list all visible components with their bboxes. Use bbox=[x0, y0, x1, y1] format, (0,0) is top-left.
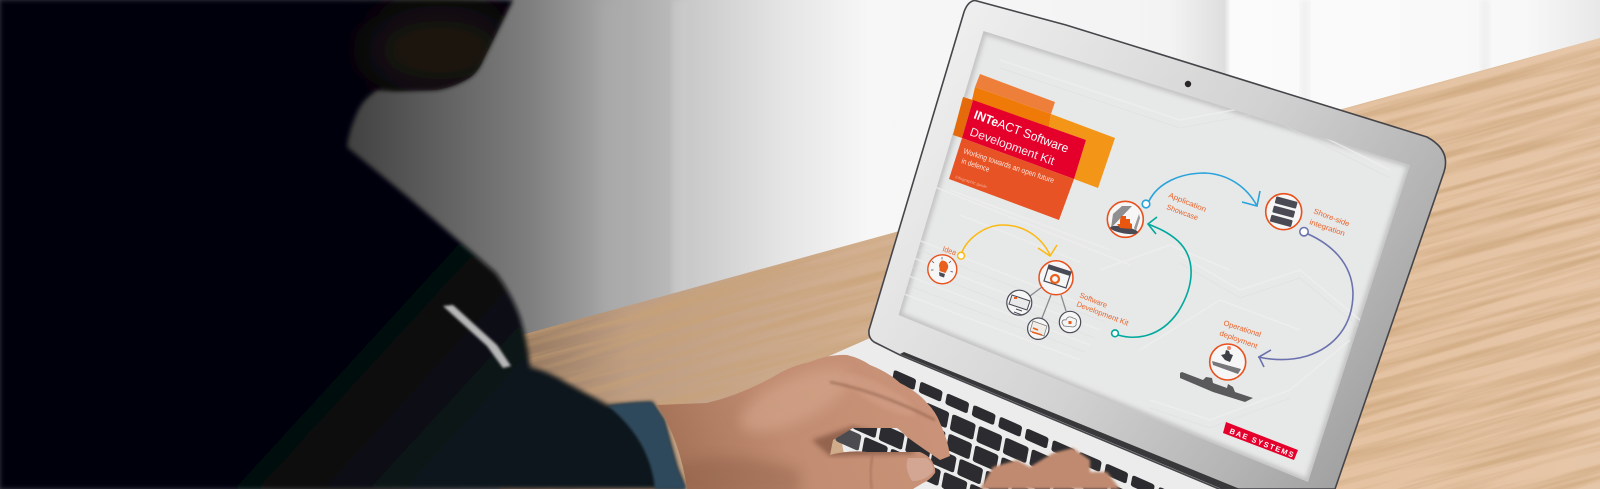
light orange panel bbox=[975, 74, 1055, 114]
connector lines bbox=[1030, 287, 1066, 318]
laptop bbox=[827, 0, 1446, 489]
slide title block bbox=[949, 74, 1115, 220]
hinge strip bbox=[900, 352, 1240, 489]
right hand fingers bbox=[980, 448, 1120, 489]
small caption: Infographic guide bbox=[955, 174, 988, 189]
screen circuit background pattern bbox=[904, 110, 1367, 344]
arrow: teal bbox=[1112, 217, 1191, 337]
gap between arm and body bbox=[443, 305, 511, 368]
left thumb nail bbox=[907, 458, 933, 481]
icon: form window bbox=[1028, 318, 1049, 339]
webcam bbox=[1185, 81, 1191, 87]
icon: cloud bbox=[1059, 311, 1081, 333]
arrow: purple bbox=[1258, 228, 1353, 367]
label: Operational deployment bbox=[1218, 318, 1263, 351]
arrow: blue bbox=[1142, 173, 1260, 208]
dark orange panel bbox=[953, 97, 973, 138]
red title panel bbox=[962, 100, 1086, 179]
person head shading bbox=[365, 5, 515, 95]
icon: monitor bbox=[1007, 290, 1032, 315]
label: Shore-side integration bbox=[1308, 206, 1351, 238]
icon: servers bbox=[1266, 194, 1302, 230]
keyboard keys bbox=[833, 350, 1191, 489]
title text: Development Kit bbox=[968, 125, 1057, 168]
icon: light bulb bbox=[928, 255, 957, 284]
typing hands bbox=[650, 350, 1120, 489]
orange-red subtitle panel bbox=[949, 138, 1074, 220]
label: Idea: Idea bbox=[941, 244, 958, 257]
BAE Systems logo: BAE SYSTEMS bbox=[1228, 426, 1295, 459]
flow: application showcase to shore-side integration bbox=[1142, 173, 1351, 238]
mid orange panel bbox=[972, 87, 1051, 127]
person: head and shoulder silhouette bbox=[0, 0, 686, 489]
icon: software development kit bbox=[1039, 261, 1073, 295]
flow: software development kit to application showcase bbox=[1107, 191, 1208, 337]
ship silhouette bbox=[1180, 372, 1253, 402]
shirt sleeve cuff bbox=[608, 402, 686, 489]
label: Operational deployment: Operational bbox=[1222, 318, 1263, 339]
label: Operational deployment: deployment bbox=[1218, 328, 1260, 351]
laptop lid bbox=[869, 0, 1446, 489]
label: Application Showcase bbox=[1165, 191, 1208, 222]
label: Shore-side integration: Shore-side bbox=[1312, 206, 1351, 228]
label: Application Showcase: Showcase bbox=[1165, 202, 1199, 222]
subtitle text: Working towards an open future bbox=[962, 146, 1055, 185]
amber panel bbox=[1049, 114, 1115, 188]
laptop base deck bbox=[827, 338, 1240, 489]
label: Software Development Kit: Development Kit bbox=[1075, 299, 1131, 328]
left hand bbox=[650, 350, 960, 489]
label: Application Showcase: Application bbox=[1167, 191, 1208, 214]
flow: shore-side integration to operational deployment bbox=[1180, 228, 1353, 402]
arrow: yellow bbox=[958, 225, 1057, 259]
title text: INTeACT Software bbox=[972, 108, 1071, 156]
person body bbox=[0, 0, 686, 489]
subtitle text: in defence bbox=[960, 156, 991, 174]
icon: ship in circle bbox=[1210, 344, 1246, 380]
flow: idea to software development kit bbox=[928, 225, 1131, 339]
screen bbox=[880, 31, 1410, 482]
icon: application showcase bbox=[1107, 201, 1143, 237]
wooden table bbox=[500, 38, 1600, 489]
label: Shore-side integration: integration bbox=[1308, 217, 1346, 238]
label: Software Development Kit: Software bbox=[1078, 291, 1109, 310]
